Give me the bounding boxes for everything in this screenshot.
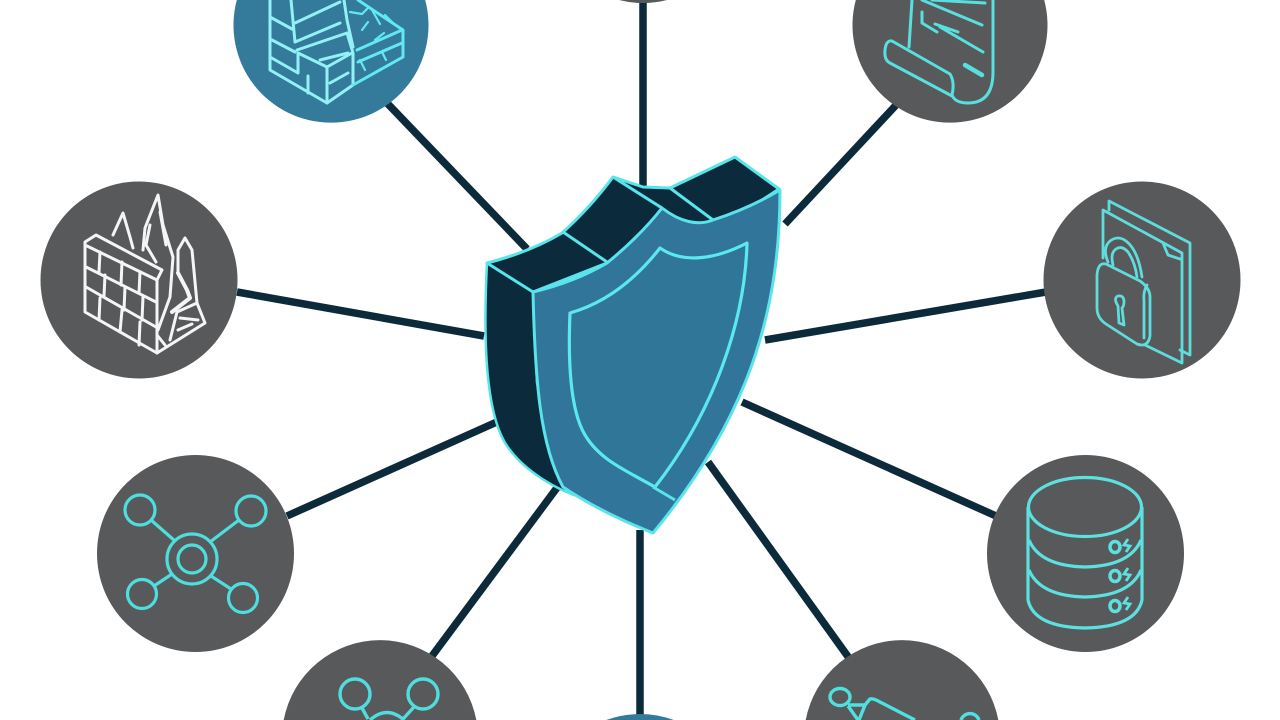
- node: bottom-left network (cropped): [284, 640, 476, 720]
- icon: padlock over documents: [1097, 201, 1190, 363]
- shield: central emblem: [485, 157, 780, 533]
- node: burning firewall: [40, 182, 238, 378]
- icon: network graph: [125, 495, 266, 612]
- node: bottom-right diagram (cropped): [806, 640, 998, 720]
- node: bottom centre (cropped): [606, 714, 674, 720]
- icon: database cylinder: [1028, 478, 1142, 628]
- icon: scroll document: [885, 0, 993, 103]
- shield detail lines: [563, 177, 713, 500]
- shield front face: [533, 190, 780, 533]
- icon: cracked brick wall: [270, 0, 403, 103]
- shield left side wall: [485, 263, 583, 498]
- node: top centre (cropped): [619, 0, 667, 3]
- node: policy scroll: [852, 0, 1048, 123]
- node: locked file: [1044, 182, 1240, 378]
- shield top faces: [487, 157, 779, 292]
- node: database: [987, 455, 1184, 652]
- node: network hub: [97, 455, 294, 652]
- icon: firewall with flames: [85, 195, 205, 353]
- shield inner panel: [569, 243, 747, 487]
- connector spokes: [237, 0, 1046, 716]
- icon: linked triangle nodes: [830, 688, 979, 720]
- icon: connected nodes: [340, 679, 438, 720]
- node: brick wall: [234, 0, 429, 123]
